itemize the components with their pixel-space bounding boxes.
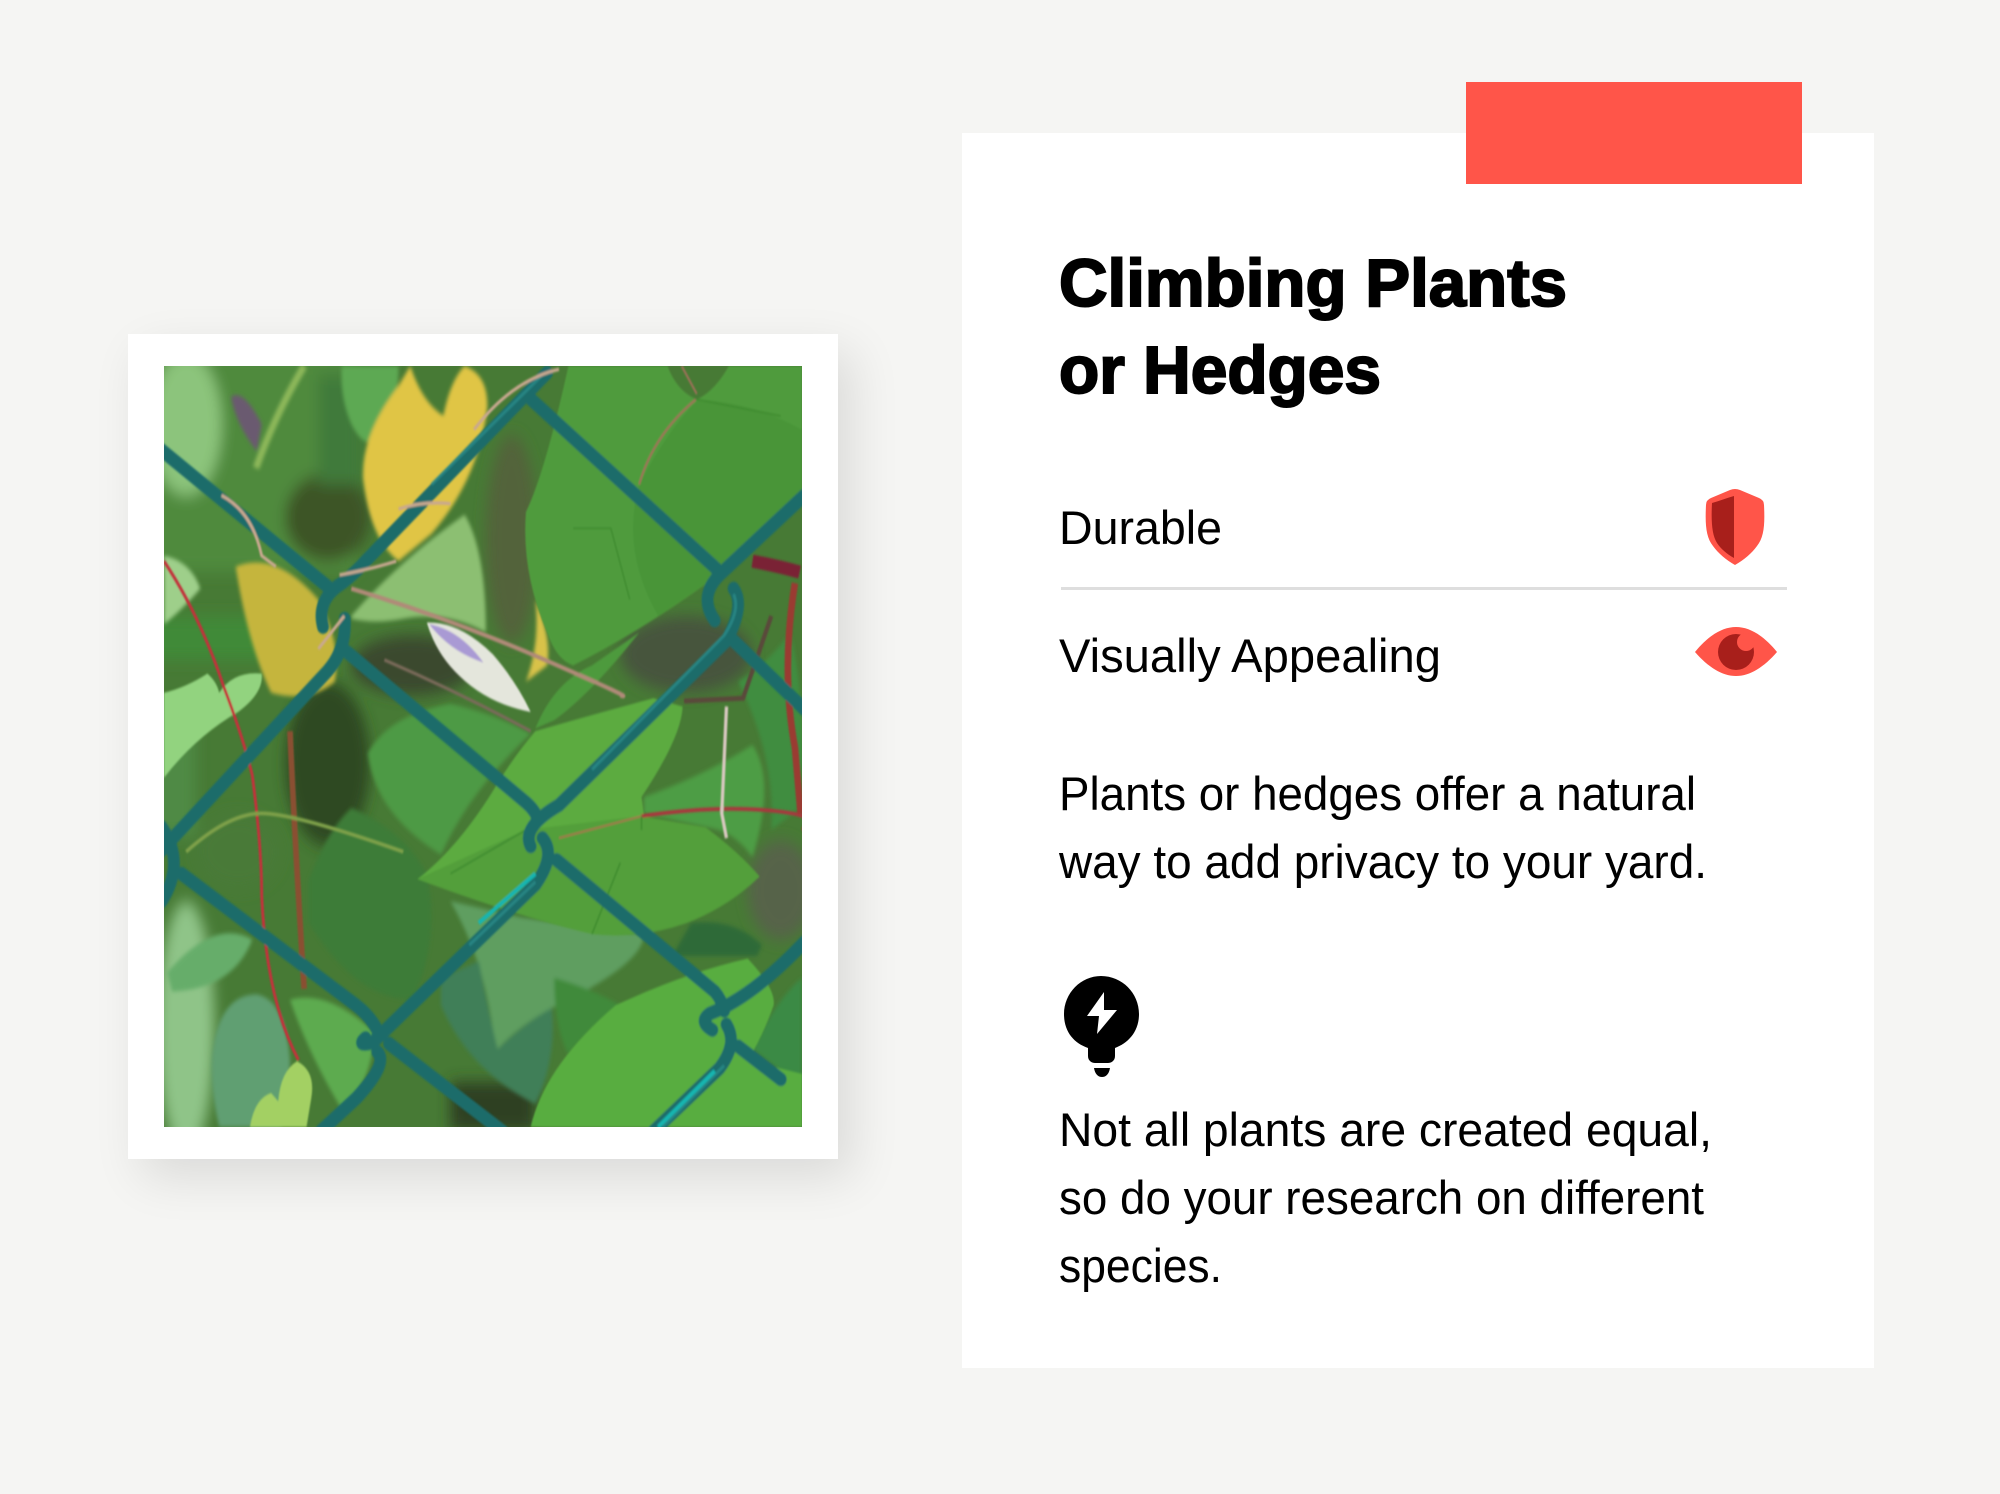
panel: photo card — [128, 334, 838, 1159]
big top right leaf — [525, 366, 802, 665]
icon: eye — [1695, 627, 1777, 676]
heading: or Hedges — [1059, 333, 1381, 408]
purple bud — [427, 623, 531, 712]
heading: Climbing Plants — [1059, 246, 1567, 321]
bottom right leaf — [531, 959, 802, 1127]
paragraph: tip — [1059, 1103, 1712, 1292]
photo: plants on chain-link fence — [164, 366, 802, 1127]
paragraph: tip: species. — [1059, 1239, 1222, 1292]
paragraph: tip: Not all plants are created equal, — [1059, 1103, 1712, 1156]
paragraph: description: way to add privacy to your yard. — [1058, 835, 1707, 888]
paragraph: description — [1058, 767, 1707, 888]
yellow leaves — [363, 366, 487, 561]
lower leaves — [450, 901, 644, 1052]
icon: shield — [1706, 489, 1764, 565]
pale centre leaf — [351, 515, 486, 632]
lower left dark leaf — [309, 808, 432, 1000]
row: Visually Appealing: Visually Appealing — [1059, 629, 1441, 682]
chain-link wires — [158, 373, 804, 1131]
paragraph: description: Plants or hedges offer a natural — [1059, 767, 1696, 820]
row: Durable: Durable — [1059, 501, 1222, 554]
red tab — [1466, 82, 1802, 184]
divider — [1061, 587, 1787, 590]
heading — [1059, 246, 1567, 408]
behind centre leaf — [368, 704, 531, 855]
panel: info card — [962, 133, 1874, 1368]
right leaf — [644, 745, 764, 857]
small light leaves — [164, 673, 262, 778]
big centre leaf — [417, 698, 760, 935]
icon: lightbulb with bolt — [1064, 976, 1139, 1077]
upper left leaves — [342, 366, 399, 442]
thin tendril around the wire — [222, 369, 559, 649]
paragraph: tip: so do your research on different — [1059, 1171, 1704, 1224]
stems and veins — [164, 366, 810, 1060]
